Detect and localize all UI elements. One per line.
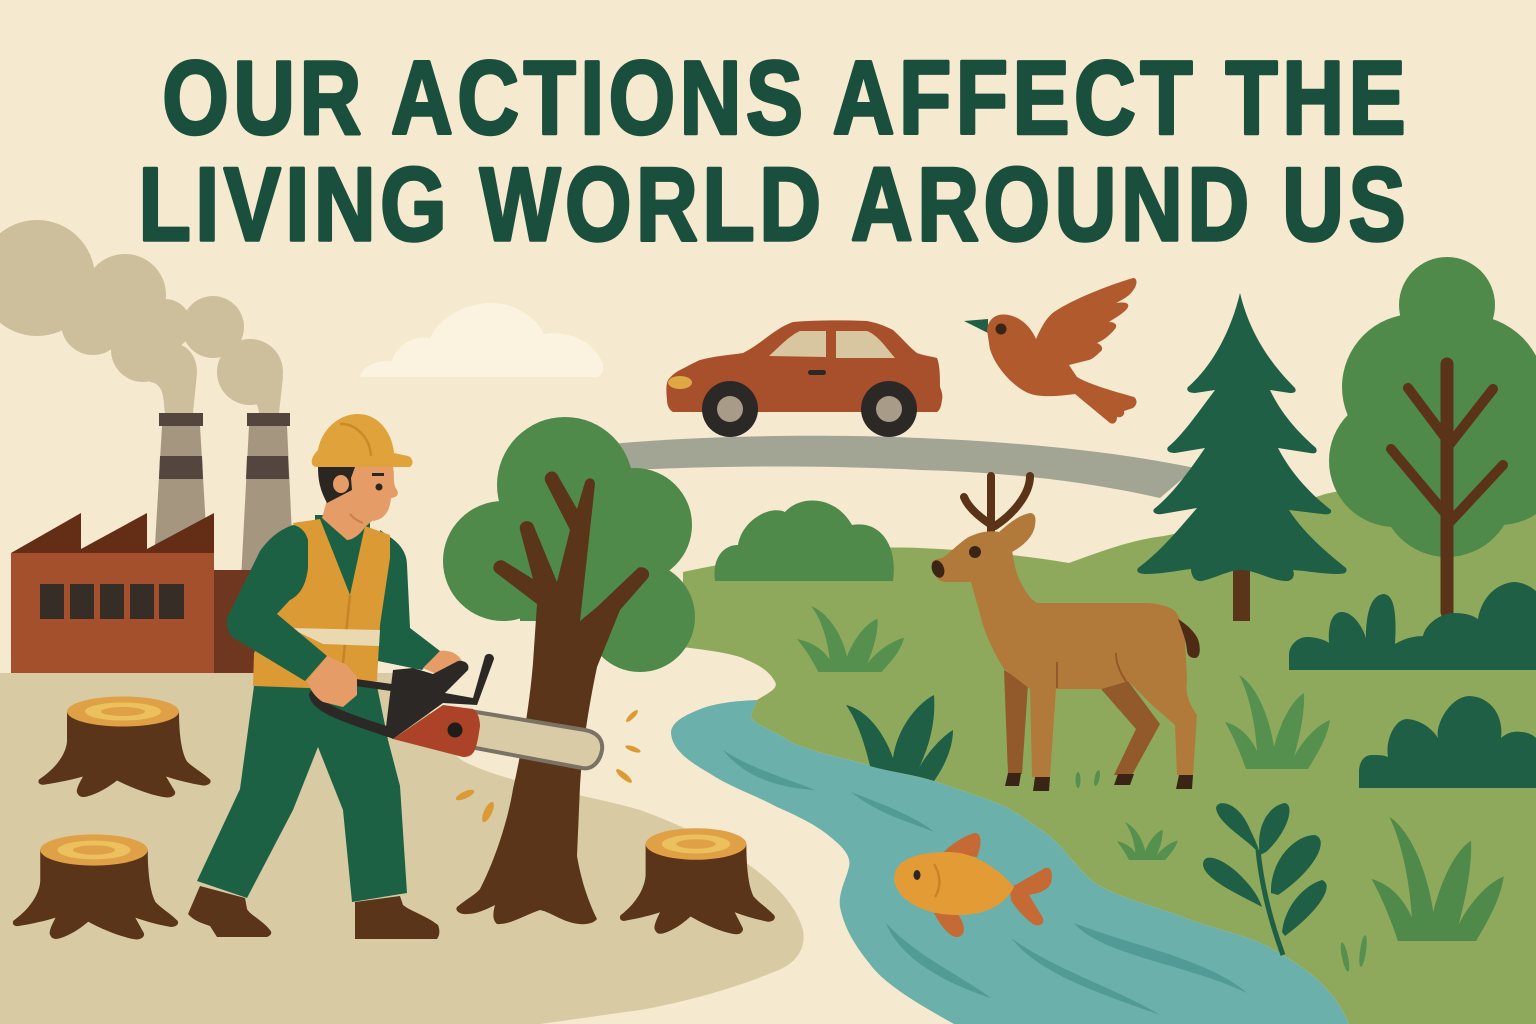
green meadow <box>683 450 1536 1024</box>
saw handle <box>314 654 494 739</box>
body <box>932 531 1197 777</box>
right tree trunk <box>1391 364 1503 612</box>
ear <box>333 475 349 493</box>
bare ground <box>0 673 804 1024</box>
car windows <box>769 331 826 357</box>
saw body <box>393 705 480 757</box>
bird eye <box>996 324 1006 334</box>
road <box>600 436 1195 498</box>
eye and brow <box>372 473 384 490</box>
boots <box>188 886 271 937</box>
fish body <box>894 852 1014 915</box>
right tree <box>1329 257 1536 612</box>
stump: top <box>38 696 211 798</box>
plant: grass right of the deer <box>1225 675 1330 769</box>
vest zip <box>343 595 350 663</box>
bird <box>964 278 1137 424</box>
meadow plants <box>797 606 1504 972</box>
tree trunk <box>456 472 649 924</box>
plant: small grass <box>1117 822 1178 860</box>
factory building <box>11 553 214 673</box>
vest stripe <box>290 628 380 646</box>
car headlight <box>668 376 692 389</box>
hat crease <box>340 424 371 456</box>
factory <box>11 413 294 673</box>
tree crown <box>443 417 695 672</box>
legs <box>197 686 407 902</box>
title: OUR ACTIONS AFFECT THE <box>162 41 1405 156</box>
ear <box>999 513 1035 552</box>
plant: leafy stem <box>1203 803 1327 955</box>
stump: lower left <box>13 834 178 939</box>
saw hub <box>448 722 462 738</box>
right arm <box>365 530 440 670</box>
plant: dark grass by the river <box>846 695 953 781</box>
river <box>671 700 1349 1024</box>
sawtooth roof <box>11 513 214 553</box>
cloud <box>360 303 603 377</box>
stumps <box>13 696 775 939</box>
worker <box>188 414 463 939</box>
car door handle <box>808 370 826 375</box>
antlers <box>964 476 1030 532</box>
wood chips <box>454 709 641 824</box>
left arm <box>227 525 327 681</box>
guide bar <box>470 711 602 768</box>
gill <box>934 864 939 897</box>
worker left hand <box>307 656 357 707</box>
stump: lower right <box>620 828 775 934</box>
head <box>322 467 398 540</box>
tail <box>1178 619 1200 658</box>
eye <box>969 546 981 558</box>
hair <box>318 467 355 503</box>
factory windows <box>40 584 184 619</box>
central tree <box>443 417 695 924</box>
factory side wing <box>214 570 274 673</box>
smoke plumes <box>0 220 283 413</box>
plant: upper grass <box>797 606 904 672</box>
far rear leg <box>1101 681 1160 775</box>
title: LIVING WORLD AROUND US <box>139 147 1405 263</box>
fish fins <box>943 833 981 857</box>
car wheels <box>702 381 758 437</box>
shirt <box>315 515 370 600</box>
mouth <box>350 514 363 523</box>
plant: tiny blades <box>1076 770 1368 972</box>
chimneys <box>155 413 294 580</box>
river ripples <box>723 750 1247 1015</box>
fish <box>894 833 1052 937</box>
far front leg <box>1004 670 1028 774</box>
hooves <box>1005 773 1193 791</box>
right tree crown <box>1329 257 1536 557</box>
plant: broad grass bottom right <box>1371 817 1504 941</box>
title <box>139 41 1405 263</box>
bushes right <box>1289 582 1536 788</box>
deer <box>929 476 1200 791</box>
car <box>666 320 942 437</box>
nose <box>929 558 947 580</box>
pine tree <box>1137 293 1347 621</box>
bird beak <box>964 319 988 333</box>
right hand <box>423 651 463 677</box>
far bush <box>714 501 894 581</box>
hard hat <box>312 414 412 467</box>
bird wing and body <box>987 278 1137 424</box>
safety vest <box>253 519 390 688</box>
body lines <box>1057 653 1128 688</box>
chainsaw <box>314 654 602 768</box>
